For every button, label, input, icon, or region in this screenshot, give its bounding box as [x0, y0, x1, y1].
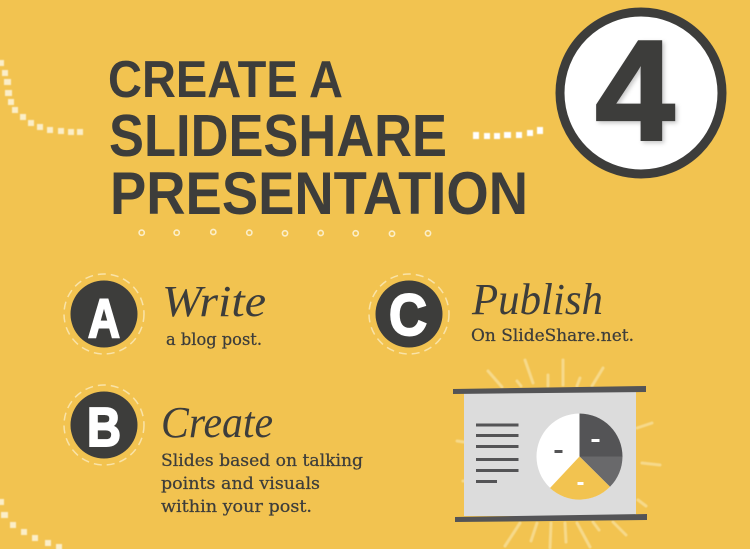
badge C [369, 274, 449, 354]
title [108, 51, 528, 227]
badge B [64, 385, 144, 465]
badge B: B [87, 396, 121, 458]
badge A: A [88, 287, 120, 349]
illustration: presentation screen [453, 360, 660, 548]
text: a blog post: a blog post. [166, 330, 262, 350]
step number badge: 4 [596, 12, 675, 170]
screen panel [464, 391, 636, 516]
decorative beads: top right of title [473, 127, 543, 139]
heading: Create: Create [161, 398, 273, 447]
decorative beads: bottom left curve [0, 499, 62, 549]
title: CREATE A [108, 51, 343, 109]
pie chart [536, 414, 622, 500]
bottom roller [455, 514, 647, 522]
top roller [453, 386, 646, 394]
heading: Write: Write [162, 277, 266, 326]
step C [369, 274, 634, 354]
title: SLIDESHARE [109, 103, 447, 169]
light rays [457, 360, 660, 548]
decorative ring dots under title [139, 229, 431, 236]
text: slides description [161, 451, 363, 517]
badge C: C [389, 283, 427, 348]
heading: Publish: Publish [471, 275, 603, 324]
decorative beads: top left curve [0, 60, 83, 135]
badge A [64, 274, 144, 354]
step B [64, 385, 363, 517]
title: PRESENTATION [110, 160, 528, 227]
text: slides description: within your post. [161, 497, 312, 517]
text: on slideshare: On SlideShare.net. [471, 326, 634, 346]
step A [64, 274, 266, 354]
text: slides description: Slides based on talking [161, 451, 363, 471]
step number badge [560, 12, 722, 174]
text lines [476, 424, 518, 483]
text: slides description: points and visuals [161, 474, 320, 494]
